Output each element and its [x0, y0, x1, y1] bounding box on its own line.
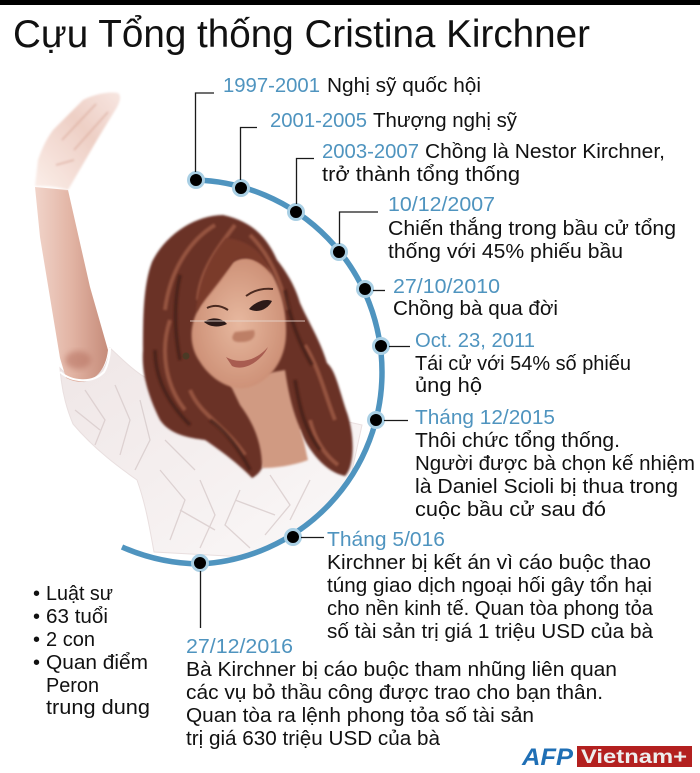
smile: [226, 347, 268, 368]
entry: 1997-2001: Nghị sỹ quốc hội: [327, 75, 481, 97]
entry: Tháng 12/2015: Người được bà chọn kế nhiệm: [415, 453, 695, 475]
personal facts list: Luật sư: [46, 583, 113, 605]
personal facts list: 2 con: [46, 629, 95, 651]
personal facts list: •: [33, 606, 40, 628]
logo: AFP Vietnam+: [521, 744, 692, 771]
entry: Tháng 12/2015: là Daniel Scioli bị thua trong: [415, 476, 678, 498]
entry: Tháng 5/016: [327, 529, 654, 643]
entry: 10/12/2007: 10/12/2007: [388, 194, 495, 216]
entry: Tháng 12/2015: [415, 407, 695, 521]
eyebrows: [207, 289, 273, 310]
eyes: [204, 318, 227, 326]
connector lines: [196, 93, 410, 628]
timeline dots: [188, 172, 388, 570]
entry: 2003-2007: [322, 141, 665, 186]
entry: 1997-2001: [223, 75, 481, 97]
entry: Oct. 23, 2011: Tái cử với 54% số phiếu: [415, 353, 631, 375]
top black bar: [0, 0, 700, 5]
entry: Oct. 23, 2011: ủng hộ: [415, 375, 482, 397]
neck and chest: [228, 370, 308, 468]
logo: AFP Vietnam+: Vietnam+: [581, 747, 687, 768]
entry: Tháng 12/2015: cuộc bầu cử sau đó: [415, 499, 606, 521]
personal facts list: Peron: [46, 675, 99, 697]
entry: 27/10/2010: 27/10/2010: [393, 276, 500, 298]
logo: AFP Vietnam+: AFP: [521, 744, 574, 771]
entry: 27/10/2010: [393, 276, 558, 320]
entry: Tháng 5/016: cho nền kinh tế. Quan tòa phong tỏa: [327, 598, 654, 620]
entry: 2003-2007: trở thành tổng thống: [322, 164, 520, 186]
elbow shadow: [65, 351, 91, 369]
personal facts list: •: [33, 629, 40, 651]
entry: Tháng 5/016: Tháng 5/016: [327, 529, 445, 551]
fringe over forehead: [196, 238, 272, 312]
thin image seam: [190, 320, 305, 322]
hair: [143, 215, 353, 478]
entry: 1997-2001: 1997-2001: [223, 75, 320, 97]
personal facts list: 63 tuổi: [46, 606, 108, 628]
sleeve edge: [60, 348, 110, 380]
raised hand: [35, 92, 120, 190]
personal facts list: [33, 583, 150, 719]
finger shading: [56, 104, 108, 165]
entry: 10/12/2007: Chiến thắng trong bầu cử tổng: [388, 217, 676, 240]
hair dark strands: [155, 275, 320, 470]
entry: 2003-2007: Chồng là Nestor Kirchner,: [425, 141, 665, 163]
raised arm: [35, 187, 108, 382]
personal facts list: trung dung: [46, 697, 150, 719]
entry: 2001-2005: 2001-2005: [270, 110, 367, 132]
entry: 10/12/2007: thống với 45% phiếu bầu: [388, 241, 623, 263]
title: Cựu Tổng thống Cristina Kirchner: [13, 13, 590, 56]
personal facts list: Quan điểm: [46, 652, 148, 674]
entry: Oct. 23, 2011: [415, 330, 631, 397]
entry: 2001-2005: [270, 110, 517, 132]
hair highlights: [165, 225, 338, 465]
earring: [182, 352, 190, 360]
entry: Oct. 23, 2011: Oct. 23, 2011: [415, 330, 535, 352]
entry: 27/12/2016: các vụ bỏ thầu công được trao cho bạn thân.: [186, 682, 603, 704]
entry: 27/12/2016: 27/12/2016: [186, 636, 293, 658]
personal facts list: •: [33, 652, 40, 674]
entry: 27/12/2016: [186, 636, 617, 750]
entry: 10/12/2007: [388, 194, 676, 263]
entry: Tháng 5/016: túng giao dịch ngoại hối gây tổn hại: [327, 575, 652, 597]
personal facts list: •: [33, 583, 40, 605]
entry: Tháng 12/2015: Thôi chức tổng thống.: [415, 430, 620, 452]
entry: Tháng 5/016: Kirchner bị kết án vì cáo buộc thao: [327, 552, 651, 574]
face: [192, 258, 286, 388]
entry: 27/12/2016: Quan tòa ra lệnh phong tỏa số tài sản: [186, 705, 534, 727]
entry: 27/12/2016: trị giá 630 triệu USD của bà: [186, 728, 441, 750]
white dress: [60, 348, 362, 560]
entry: Tháng 5/016: số tài sản trị giá 1 triệu USD của bà: [327, 621, 654, 643]
entry: 2003-2007: 2003-2007: [322, 141, 419, 163]
photo: Cristina Kirchner waving: [35, 92, 362, 560]
timeline arc: [122, 180, 382, 564]
entry: Tháng 12/2015: Tháng 12/2015: [415, 407, 555, 429]
entry: 27/10/2010: Chồng bà qua đời: [393, 298, 558, 320]
dress texture: [75, 385, 310, 548]
entry: 27/12/2016: Bà Kirchner bị cáo buộc tham nhũng liên quan: [186, 659, 617, 681]
nose: [232, 330, 255, 342]
entry: 2001-2005: Thượng nghị sỹ: [373, 110, 517, 132]
